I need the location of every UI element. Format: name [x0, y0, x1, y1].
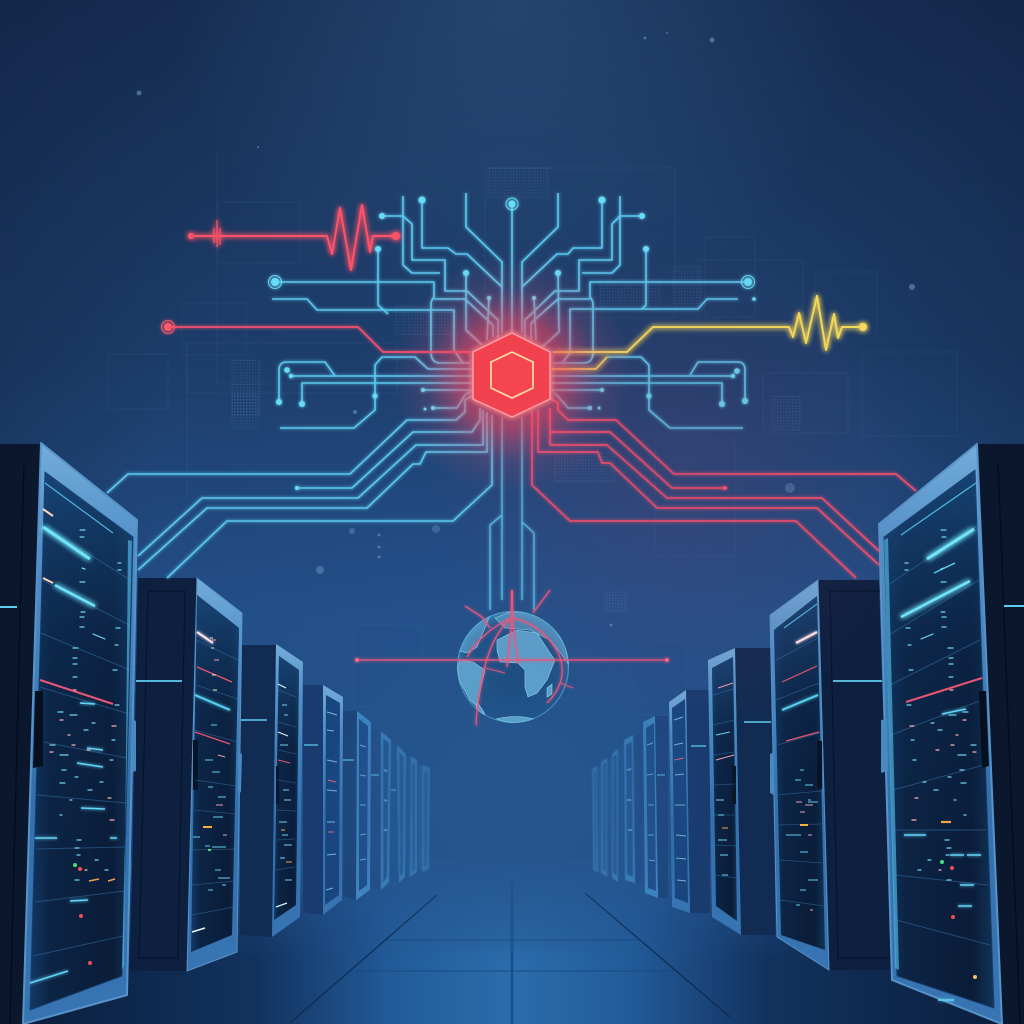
- inner hexagon: [491, 352, 533, 398]
- status lights: [905, 530, 976, 880]
- right rack 3: [708, 648, 775, 935]
- left mid traces: [279, 362, 473, 402]
- right rack 8: [601, 758, 612, 877]
- central hexagon chip: [473, 333, 550, 417]
- left rack 1: [0, 443, 137, 1024]
- right rack 1: [879, 444, 1024, 1024]
- right mid traces: [607, 357, 743, 428]
- top right traces: [522, 200, 602, 287]
- right rack 9: [592, 766, 602, 873]
- left rack 2: [130, 578, 242, 971]
- left rack 7: [391, 745, 406, 883]
- center vertical traces: [511, 204, 513, 333]
- continents: [457, 612, 569, 722]
- distance fog: [300, 650, 724, 950]
- left rack 3: [240, 644, 303, 937]
- top left traces: [275, 282, 470, 363]
- right rack 6: [624, 735, 643, 883]
- circuit traces: red: [168, 327, 916, 578]
- left rack 8: [406, 756, 417, 877]
- left rack 4: [303, 685, 343, 915]
- left rack 5: [343, 711, 371, 900]
- ring node: top center: [506, 198, 518, 210]
- circuit traces: blue: [107, 193, 748, 578]
- network nodes: [268, 196, 756, 490]
- floor: [0, 860, 1024, 1024]
- core glow: [392, 255, 632, 495]
- server row: left: [0, 443, 430, 1024]
- side tint: red trace zone: [430, 230, 930, 730]
- rack shelves: [888, 525, 990, 945]
- rack shelves: [33, 526, 132, 956]
- pulse line: red: [189, 205, 399, 270]
- ring node: red: [162, 320, 727, 490]
- right rack 5: [643, 716, 668, 898]
- pulse line: yellow: [550, 296, 866, 369]
- right rack 2: [770, 580, 892, 970]
- lower left bus: [107, 396, 472, 493]
- globe: [457, 611, 569, 723]
- right rack 4: [669, 690, 710, 913]
- globe arcs: [355, 590, 668, 725]
- left rack 9: [418, 765, 430, 872]
- ring node: right: [742, 276, 754, 288]
- background particles: [136, 32, 915, 626]
- central bus lines to globe: [490, 417, 534, 610]
- ring node: left: [268, 276, 282, 288]
- right rack 7: [612, 749, 624, 882]
- server row: right: [592, 444, 1024, 1024]
- left rack 6: [370, 731, 391, 890]
- blueprint background panels: [108, 150, 957, 715]
- status lights: [50, 530, 121, 880]
